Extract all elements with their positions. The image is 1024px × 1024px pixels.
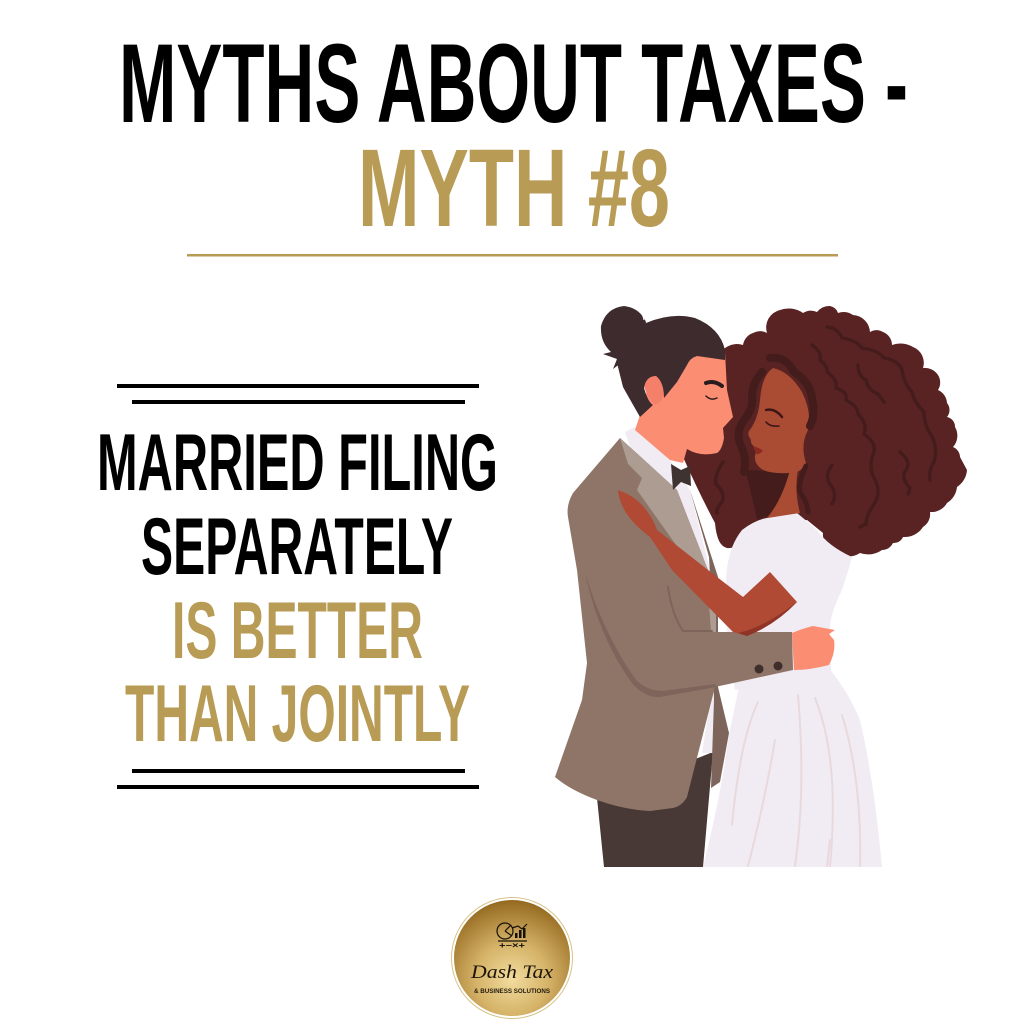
- arm shadow: [738, 602, 797, 636]
- title: MYTH #8: [358, 127, 670, 250]
- man's neck and face: [635, 345, 733, 463]
- logo: Dash Tax & Business Solutions: Dash Tax: [470, 962, 554, 983]
- logo icon: chart and math symbols: [497, 923, 527, 941]
- jacket right panel: [690, 490, 729, 788]
- callout: myth statement: [97, 384, 498, 789]
- woman's arm: [618, 490, 797, 636]
- woman's hair: [683, 306, 967, 557]
- callout: myth statement: THAN JOINTLY: [125, 669, 470, 759]
- skirt folds: [732, 695, 860, 866]
- sleeve shadow: [585, 573, 716, 697]
- title: [119, 21, 908, 250]
- woman's dress bodice: [726, 513, 852, 690]
- sleeve buttons: [754, 662, 782, 674]
- logo: Dash Tax & Business Solutions: & BUSINESS SOLUTIONS: [474, 988, 551, 995]
- woman's skirt: [703, 668, 882, 867]
- man's trousers: [597, 752, 713, 867]
- logo: Dash Tax & Business Solutions: [452, 898, 572, 1018]
- callout: myth statement: MARRIED FILING: [97, 418, 498, 508]
- logo: Dash Tax & Business Solutions: +−×+: [499, 941, 525, 950]
- hair curl strands: [716, 327, 936, 527]
- woman's curls framing face: [739, 358, 814, 512]
- illustration: embracing couple: [555, 306, 967, 867]
- man's hand: [792, 626, 835, 670]
- woman's neck: [767, 470, 800, 518]
- jacket lapel: [620, 438, 716, 632]
- bow tie: [671, 464, 691, 490]
- callout: myth statement: SEPARATELY: [141, 502, 453, 592]
- man's eyebrow and eye: [706, 382, 722, 399]
- man's jacket with sleeve: [555, 438, 793, 811]
- woman's face: [748, 368, 809, 473]
- man's shirt: [625, 427, 716, 753]
- man's ear: [644, 376, 664, 405]
- hair bun highlight: [630, 306, 644, 320]
- callout: myth statement: IS BETTER: [172, 586, 423, 676]
- shadow under woman's chin: [745, 470, 792, 520]
- woman's features: [753, 410, 782, 454]
- man's hair: [617, 316, 725, 417]
- man's hair bun: [601, 306, 646, 369]
- jacket pocket crease: [668, 587, 712, 631]
